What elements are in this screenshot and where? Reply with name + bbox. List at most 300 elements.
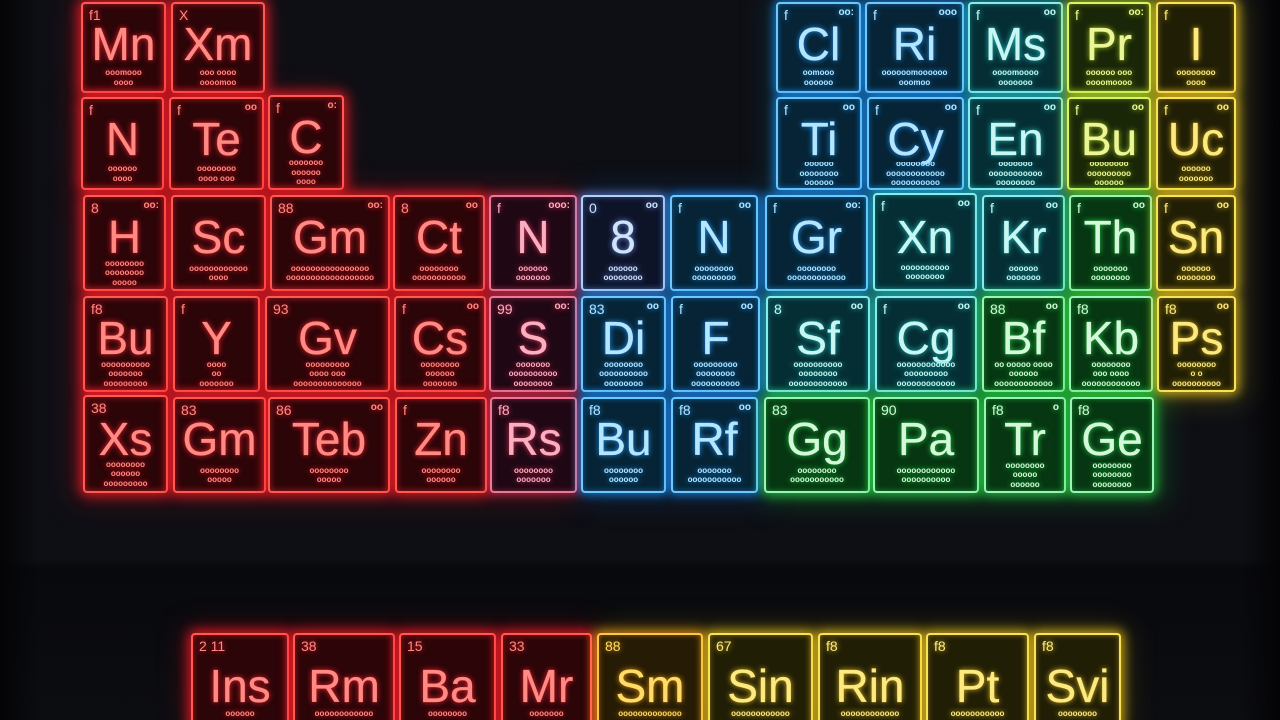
element tile: Rf: ooooooooooo <box>688 475 741 484</box>
element tile: Bu: Bu <box>595 413 652 465</box>
element tile: Gm: 83 <box>181 402 197 418</box>
element tile: I: oooooooo <box>1176 68 1216 77</box>
element tile: Bu: oooooo <box>609 475 638 484</box>
element tile: Ms: f <box>976 7 980 23</box>
element tile: Bu: f <box>1075 102 1079 118</box>
element tile: Rm: Rm <box>308 660 380 712</box>
element tile: Uc: oooooo <box>1181 164 1211 173</box>
element tile: N: f <box>497 200 501 216</box>
element tile: Gm: ooooo <box>207 475 232 484</box>
element tile: Th: oooooooo <box>1091 273 1130 282</box>
element tile: Gv: Gv <box>298 312 357 364</box>
element tile: Te: oooo ooo <box>198 174 235 182</box>
element tile: Sf <box>766 296 870 392</box>
element tile: Cg: f <box>883 301 887 317</box>
element tile: Ms <box>968 2 1063 93</box>
element tile: Rs: f8 <box>498 402 510 418</box>
element tile: Xn: f <box>881 198 885 214</box>
element tile: Bu: ooooooo <box>108 369 143 378</box>
element tile: Tr: o <box>1053 402 1059 413</box>
lower periodic table row <box>178 620 1132 720</box>
element tile: Pt <box>926 633 1029 720</box>
element tile: Sf: oo <box>851 301 863 312</box>
element tile: Cl <box>776 2 861 93</box>
element tile: Kr: oo <box>1046 200 1058 211</box>
element tile: C <box>268 95 344 190</box>
element tile: Rin <box>818 633 922 720</box>
element tile: Svi: Svi <box>1046 660 1109 712</box>
element tile: N <box>489 195 577 291</box>
element tile: Cs: Cs <box>412 312 468 364</box>
element tile: Kb <box>1069 296 1153 392</box>
element tile: Gm: 88 <box>278 200 294 216</box>
element tile: N: oooooooo <box>694 264 734 272</box>
element tile: Bu: Bu <box>97 312 154 364</box>
element tile: Cs: f <box>402 301 406 317</box>
element tile: Xn <box>873 193 977 291</box>
element tile: Ri: ooo <box>939 7 957 18</box>
element tile: Xs: ooooooooo <box>104 479 147 488</box>
element tile: Cy: f <box>875 102 879 118</box>
element tile: Y <box>173 296 260 392</box>
element tile: Zn: oooooooo <box>421 466 461 474</box>
element tile: Th: Th <box>1084 211 1137 263</box>
element tile: Gm: oooooooooooooooooo <box>286 273 374 282</box>
element tile: Pr <box>1067 2 1151 93</box>
element tile: Ct: 8 <box>401 200 409 216</box>
element tile: Ins: oooooo <box>225 709 255 718</box>
element tile: S <box>489 296 577 392</box>
element tile: Sf: 8 <box>774 301 782 317</box>
element tile: Sm: Sm <box>616 660 684 712</box>
element tile: Pt: Pt <box>956 660 999 712</box>
element tile: Di <box>581 296 666 392</box>
element tile: Xm <box>171 2 265 93</box>
element tile: 8: 0 <box>589 200 597 216</box>
element tile: Rin: Rin <box>835 660 905 712</box>
element tile: Pr: oo: <box>1128 7 1144 18</box>
element tile: Di: oo <box>647 301 659 312</box>
element tile: Rs: ooooooo <box>516 475 551 484</box>
element tile: Pt: f8 <box>934 638 946 654</box>
element tile: Gg: 83 <box>772 402 788 418</box>
element tile: Ms: ooooooo <box>998 78 1033 86</box>
element tile: Sm <box>597 633 703 720</box>
element tile: Sc: oooo <box>209 273 228 282</box>
element tile: N: N <box>697 211 731 263</box>
element tile: Mn: Mn <box>92 18 155 70</box>
element tile: S: 99 <box>497 301 513 317</box>
element tile: Cy <box>867 97 964 190</box>
element tile: Th: oo <box>1133 200 1145 211</box>
element tile: N: f <box>678 200 682 216</box>
element tile: Tr: f8 <box>992 402 1004 418</box>
element tile: Bu: oo <box>1132 102 1144 113</box>
element tile: Gm: Gm <box>293 211 367 263</box>
element tile: Tr: ooooo <box>1013 470 1037 479</box>
element tile: Kr: Kr <box>1000 211 1046 263</box>
element tile: Th: f <box>1077 200 1081 216</box>
element tile: Bu <box>581 397 666 493</box>
element tile: Uc <box>1156 97 1236 190</box>
element tile: Xm: X <box>179 7 188 23</box>
element tile: Gr: f <box>773 200 777 216</box>
element tile: Uc: ooooooo <box>1179 174 1213 182</box>
element tile: Teb: ooooo <box>317 475 341 484</box>
element tile: Pa <box>873 397 979 493</box>
element tile: F: oooooooo <box>696 369 735 378</box>
element tile: Rf: f8 <box>679 402 691 418</box>
element tile: Th: ooooooo <box>1093 264 1128 272</box>
element tile: Bu: Bu <box>1081 113 1137 165</box>
element tile: Rm: oooooooooooo <box>315 709 373 718</box>
element tile: Cs: oooooo <box>425 369 455 378</box>
element tile: Ct: ooooooooooo <box>412 273 466 282</box>
element tile: 8: 8 <box>610 211 636 263</box>
element tile: Sf: oooooooo <box>798 369 838 378</box>
element tile: Xs <box>83 395 168 493</box>
main periodic table grid <box>68 0 1248 506</box>
element tile: Sn <box>1156 195 1236 291</box>
element tile: Mn: f1 <box>89 7 101 23</box>
element tile: Cl: f <box>784 7 788 23</box>
element tile: Ba: oooooooo <box>428 709 467 718</box>
element tile: 8 <box>581 195 665 291</box>
element tile: Sin: oooooooooooo <box>731 709 790 718</box>
element tile: Ins: Ins <box>209 660 271 712</box>
element tile: H: oo: <box>143 200 159 211</box>
element tile: Gv: oooo ooo <box>309 369 346 378</box>
element tile: Kr <box>982 195 1065 291</box>
element tile: Ct: oo <box>466 200 478 211</box>
element tile: Ge: Ge <box>1081 413 1143 465</box>
element tile: Cy: Cy <box>887 113 944 165</box>
element tile: Cg: oo <box>958 301 970 312</box>
element tile: Pa: Pa <box>898 413 954 465</box>
element tile: Mr <box>501 633 592 720</box>
element tile: Tr <box>984 397 1066 493</box>
element tile: H: oooooooo <box>105 268 144 277</box>
element tile: Svi <box>1034 633 1121 720</box>
element tile: Gm: oooooooooooooooo <box>291 264 369 272</box>
element tile: Gr: Gr <box>791 211 842 263</box>
element tile: I <box>1156 2 1236 93</box>
element tile: Cl: oo: <box>838 7 854 18</box>
element tile: Ps: Ps <box>1170 312 1223 364</box>
element tile: Gr: oooooooooooo <box>787 273 846 282</box>
element tile: Pt: ooooooooooo <box>951 709 1004 718</box>
element tile: Te: Te <box>192 113 241 165</box>
element tile: N: N <box>106 113 139 165</box>
element tile: Bu <box>83 296 168 392</box>
element tile: Sc: Sc <box>192 211 245 263</box>
element tile: S: S <box>518 312 548 364</box>
element tile: Ri: ooomoo <box>899 78 930 86</box>
element tile: Pa: 90 <box>881 402 897 418</box>
element tile: Ge: f8 <box>1078 402 1090 418</box>
element tile: Kb: Kb <box>1083 312 1139 364</box>
element tile: Bf: oo <box>1046 301 1058 312</box>
element tile: Sin <box>708 633 813 720</box>
element tile: Rf: oo <box>739 402 751 413</box>
element tile: Cg: Cg <box>897 312 955 364</box>
element tile: Sn: oo <box>1217 200 1229 211</box>
element tile: Xm: ooo oooo <box>200 68 236 77</box>
element tile: Ins: 2 11 <box>199 638 225 654</box>
element tile: H: H <box>108 211 141 263</box>
element tile: Sin: 67 <box>716 638 732 654</box>
element tile: Uc: f <box>1164 102 1168 118</box>
element tile: C: f <box>276 100 280 116</box>
element tile: Xs: oooooooo <box>106 460 145 469</box>
element tile: Teb <box>268 397 390 493</box>
element tile: Ct <box>393 195 485 291</box>
element tile: 8: oooooo <box>608 264 638 272</box>
element tile: Te: f <box>177 102 181 118</box>
element tile: I: f <box>1164 7 1168 23</box>
element tile: Mn <box>81 2 166 93</box>
element tile: Tr: Tr <box>1004 413 1046 465</box>
element tile: Gg: ooooooooooo <box>790 475 844 484</box>
element tile: Mr: Mr <box>520 660 573 712</box>
element tile: Te: oo <box>245 102 257 113</box>
element tile: Mn: ooomooo <box>105 68 142 77</box>
element tile: Di: 83 <box>589 301 605 317</box>
element tile: Ba: Ba <box>419 660 476 712</box>
element tile: Ct: oooooooo <box>419 264 459 272</box>
element tile: Rf <box>671 397 758 493</box>
element tile: N: ooooooooo <box>692 273 736 282</box>
element tile: S: oooooooooo <box>509 369 557 378</box>
element tile: Sn: oooooooo <box>1176 273 1216 282</box>
element tile: Gr: oooooooo <box>797 264 836 272</box>
element tile: Ins <box>191 633 289 720</box>
element tile: Xs: oooooo <box>111 469 140 478</box>
element tile: Pr: f <box>1075 7 1079 23</box>
element tile: Y: Y <box>201 312 232 364</box>
element tile: Cy: oo <box>945 102 957 113</box>
element tile: Rf: Rf <box>692 413 738 465</box>
element tile: Te: oooooooo <box>197 164 236 173</box>
element tile: Bf: Bf <box>1002 312 1045 364</box>
element tile: Di: Di <box>602 312 645 364</box>
element tile: Ms: oooomoooo <box>992 68 1039 77</box>
element tile: Y: f <box>181 301 185 317</box>
element tile: En: En <box>987 113 1044 165</box>
element tile: Xn: oo <box>958 198 970 209</box>
element tile: I: I <box>1190 18 1202 70</box>
element tile: 8: oooooooo <box>603 273 643 282</box>
element tile: Ri: Ri <box>893 18 936 70</box>
element tile: Xn: Xn <box>897 211 953 263</box>
element tile: Gg <box>764 397 870 493</box>
element tile: Rf: ooooooo <box>697 466 732 474</box>
element tile: Cl: oomooo <box>803 68 834 77</box>
element tile: Sm: ooooooooooooo <box>618 709 682 718</box>
element tile: Xn: oooooooo <box>905 272 945 281</box>
element tile: N <box>81 97 164 190</box>
element tile: Cs: oo <box>467 301 479 312</box>
element tile: Ps: o o <box>1190 369 1202 378</box>
element tile: Rin: f8 <box>826 638 838 654</box>
element tile: Bu: f8 <box>589 402 601 418</box>
element tile: Pa: oooooooooo <box>902 475 950 484</box>
element tile: Rs: oooooooo <box>514 466 553 474</box>
element tile: F: oo <box>741 301 753 312</box>
element tile: N: ooo: <box>548 200 570 211</box>
element tile: C: o: <box>328 100 337 111</box>
element tile: Cg: ooooooooo <box>904 369 948 378</box>
element tile: Mn: oooo <box>114 78 133 86</box>
element tile: N <box>670 195 758 291</box>
element tile: F: f <box>679 301 683 317</box>
element tile: Teb: oo <box>371 402 383 413</box>
element tile: Xm: oooomoo <box>200 78 236 86</box>
element tile: Xn: oooooooooo <box>901 262 949 272</box>
element tile: Pr: oooomoooo <box>1086 78 1132 86</box>
element tile: Ge: oooooooo <box>1092 470 1132 479</box>
element tile: Bf <box>982 296 1065 392</box>
element tile: Rm <box>293 633 395 720</box>
element tile: F <box>671 296 760 392</box>
element tile: Bu <box>1067 97 1151 190</box>
element tile: Kb: f8 <box>1077 301 1089 317</box>
element tile: Ti: f <box>784 102 788 118</box>
element tile: Mr: ooooooo <box>529 709 564 718</box>
element tile: Bu: oooooooo <box>604 466 643 474</box>
element tile: Cs <box>394 296 486 392</box>
element tile: S: oo: <box>554 301 570 312</box>
element tile: Zn <box>395 397 487 493</box>
element tile: Gr: oo: <box>845 200 861 211</box>
element tile: Ps: oo <box>1217 301 1229 312</box>
element tile: N: N <box>516 211 550 263</box>
element tile: En: ooooooooooo <box>989 169 1042 178</box>
element tile: Cy: oooooooooooo <box>886 169 945 178</box>
element tile: Ge <box>1070 397 1154 493</box>
element tile: N: oooooo <box>518 264 548 272</box>
element tile: Ba: 15 <box>407 638 423 654</box>
element tile: N: oooooo <box>108 164 137 173</box>
element tile: N: f <box>89 102 93 118</box>
element tile: Cg <box>875 296 977 392</box>
element tile: Bf: 88 <box>990 301 1006 317</box>
element tile: Ms: Ms <box>985 18 1046 70</box>
element tile: Cl: oooooo <box>804 78 833 86</box>
element tile: I: oooo <box>1186 78 1206 86</box>
element tile: Kr: ooooooo <box>1006 273 1041 282</box>
element tile: Rin: oooooooooooo <box>841 709 899 718</box>
element tile: C: C <box>289 111 323 163</box>
element tile: Pa: oooooooooooo <box>897 466 955 474</box>
element tile: H: 8 <box>91 200 99 216</box>
element tile: Di: oooooooooo <box>599 369 648 378</box>
element tile: Uc: oo <box>1217 102 1229 113</box>
element tile: 8: oo <box>646 200 658 211</box>
element tile: Zn: Zn <box>414 413 468 465</box>
element tile: Rs <box>490 397 577 493</box>
element tile: Gm <box>270 195 390 291</box>
element tile: Gv <box>265 296 390 392</box>
element tile: Zn: oooooo <box>426 475 456 484</box>
element tile: Ms: oo <box>1044 7 1056 18</box>
element tile: Gr <box>765 195 868 291</box>
element tile: Ti <box>776 97 862 190</box>
element tile: H <box>83 195 166 291</box>
element tile: Teb: oooooooo <box>309 466 349 474</box>
element tile: Kr: oooooo <box>1009 264 1038 272</box>
element tile: Ba <box>399 633 496 720</box>
element tile: Pr: oooooo ooo <box>1086 68 1132 77</box>
element tile: Gv: 93 <box>273 301 289 317</box>
element tile: Sc <box>171 195 266 291</box>
element tile: Teb: 86 <box>276 402 292 418</box>
element tile: Gm: Gm <box>182 413 257 465</box>
element tile: Teb: Teb <box>292 413 366 465</box>
element tile: Gm: oo: <box>367 200 383 211</box>
element tile: En: oo <box>1044 102 1056 113</box>
element tile: Svi: f8 <box>1042 638 1054 654</box>
element tile: Gm: oooooooo <box>200 466 239 474</box>
element tile: Ri <box>865 2 964 93</box>
element tile: Sn: f <box>1164 200 1168 216</box>
element tile: En: f <box>976 102 980 118</box>
element tile: F: F <box>701 312 730 364</box>
element tile: Bu: ooooooooo <box>1087 169 1131 178</box>
element tile: Ps <box>1157 296 1236 392</box>
element tile: N: oo <box>739 200 751 211</box>
element tile: Kb: ooo oooo <box>1093 369 1129 378</box>
element tile: Mr: 33 <box>509 638 525 654</box>
element tile: Ri: f <box>873 7 877 23</box>
element tile: Ti: oooooooo <box>799 169 839 178</box>
element tile: Te <box>169 97 264 190</box>
element tile: Ri: oooooomoooooo <box>882 68 947 77</box>
element tile: Th <box>1069 195 1152 291</box>
element tile: C: oooooo <box>291 168 321 177</box>
element tile: Sn: oooooo <box>1181 264 1211 272</box>
element tile: Sf: Sf <box>796 312 840 364</box>
element tile: Pr: Pr <box>1086 18 1132 70</box>
element tile: Ps: f8 <box>1165 301 1177 317</box>
element tile: Y: oo <box>212 369 221 378</box>
element tile: Sc: oooooooooooo <box>189 264 248 272</box>
element tile: Bf: oooooo <box>1009 369 1038 378</box>
element tile: Bu: f8 <box>91 301 103 317</box>
element tile: Sin: Sin <box>727 660 794 712</box>
element tile: Gm <box>173 397 266 493</box>
element tile: Gg: Gg <box>786 413 848 465</box>
element tile: Rm: 38 <box>301 638 317 654</box>
element tile: En <box>968 97 1063 190</box>
element tile: Rs: Rs <box>505 413 562 465</box>
element tile: N: oooo <box>113 174 132 182</box>
element tile: N: ooooooo <box>516 273 550 282</box>
element tile: Sm: 88 <box>605 638 621 654</box>
element tile: Zn: f <box>403 402 407 418</box>
element tile: Kr: f <box>990 200 994 216</box>
element tile: Svi: oooooooo <box>1058 709 1097 718</box>
element tile: Ti: Ti <box>801 113 837 165</box>
element tile: Cl: Cl <box>797 18 840 70</box>
element tile: Uc: Uc <box>1168 113 1224 165</box>
element tile: Xs: 38 <box>91 400 107 416</box>
element tile: Xs: Xs <box>99 413 152 465</box>
element tile: Xm: Xm <box>184 18 252 70</box>
element tile: Gg: oooooooo <box>797 466 837 474</box>
element tile: Ti: oo <box>843 102 855 113</box>
element tile: Ct: Ct <box>416 211 462 263</box>
